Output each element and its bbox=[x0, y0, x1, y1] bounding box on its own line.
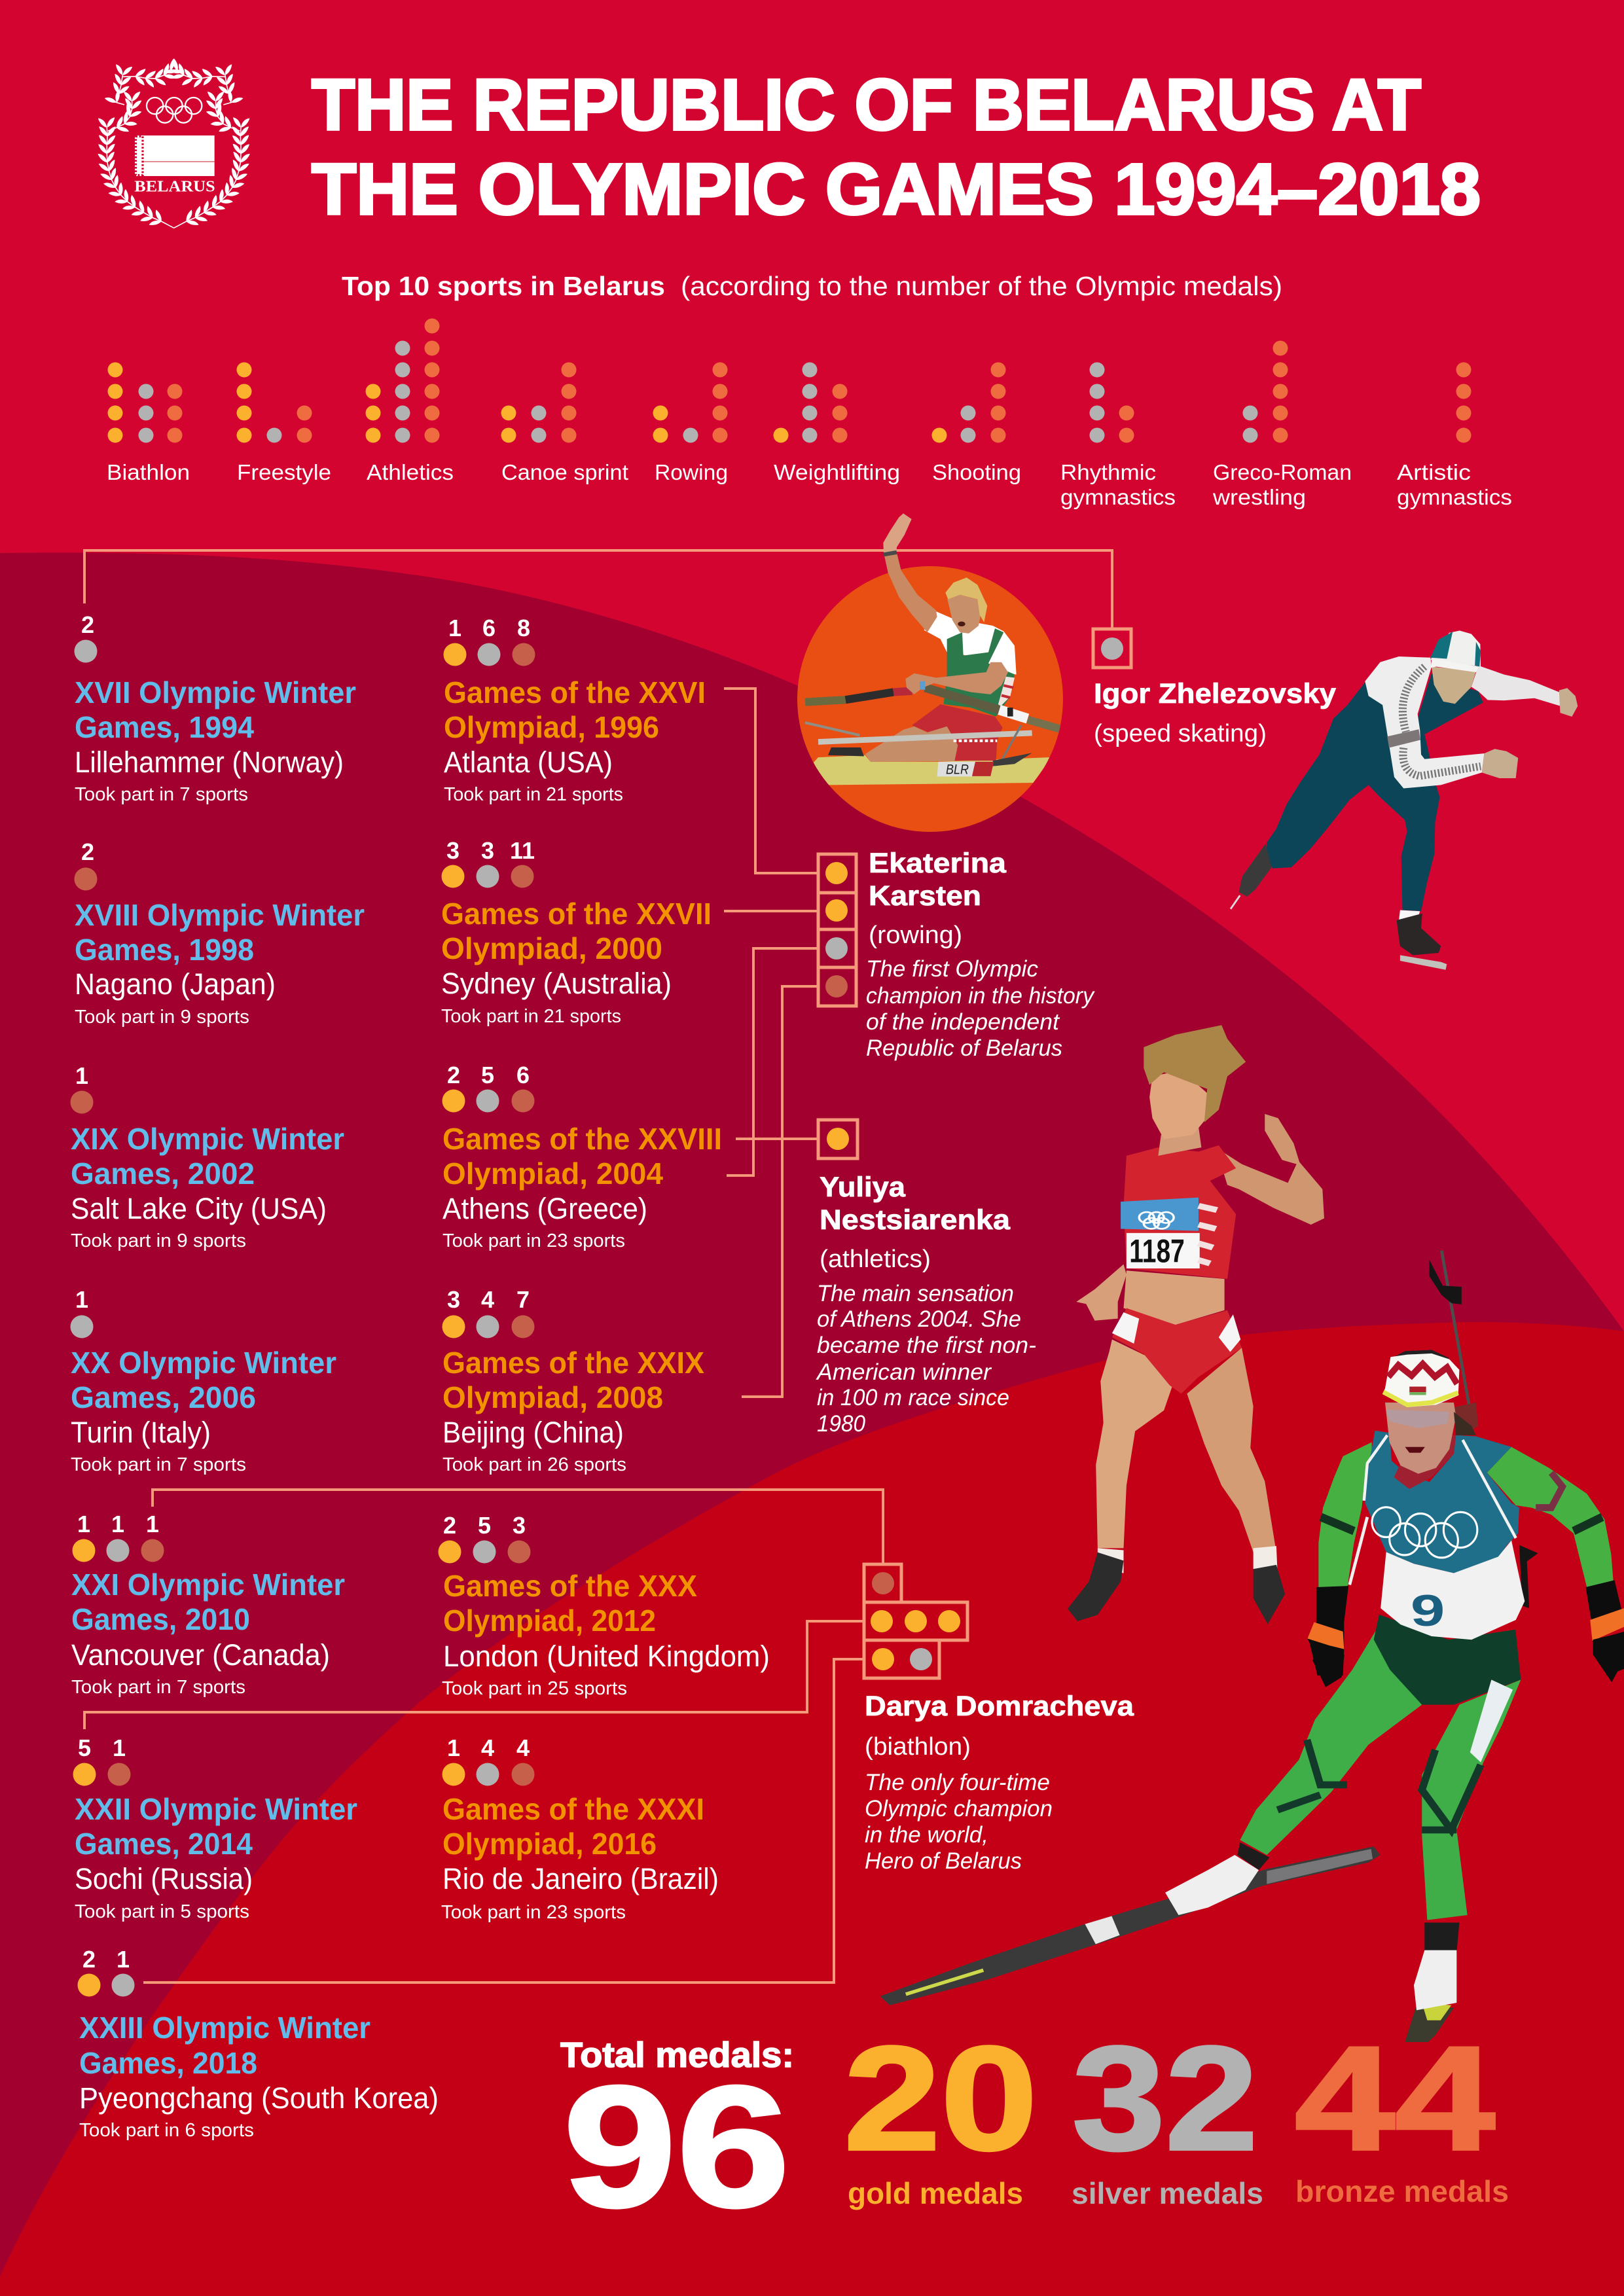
entry: XXI Winter 2010: XXI Olympic Winter bbox=[71, 1568, 345, 1602]
text: Igor Zhelezovsky: (speed skating) bbox=[1094, 720, 1267, 747]
entry: XIX Winter 2002: XIX Olympic Winter bbox=[71, 1122, 344, 1156]
sport: Biathlon: Biathlon bbox=[107, 460, 190, 484]
entry: XXI Winter 2010: Vancouver (Canada) bbox=[71, 1638, 330, 1672]
sport: Greco-Roman wrestling: wrestling bbox=[1212, 485, 1306, 509]
bronze medals: 44: bronze medals bbox=[1295, 2174, 1509, 2208]
entry: XIX Winter 2002 bbox=[71, 1062, 344, 1251]
medal boxes: Ekaterina Karsten bbox=[818, 854, 856, 1006]
entry: XXVIII Summer 2004: 2 bbox=[447, 1062, 460, 1088]
sport: Athletics bbox=[365, 318, 454, 484]
sport: Rhythmic gymnastics: Rhythmic bbox=[1060, 460, 1156, 484]
medal boxes: Darya Domracheva bbox=[864, 1564, 967, 1678]
entry: XXVII Summer 2000: Games of the XXVII bbox=[441, 897, 712, 931]
entry: XXVI Summer 1996 bbox=[444, 615, 706, 805]
entry: XXXI Summer 2016: 4 bbox=[516, 1734, 530, 1761]
text: Ekaterina Karsten: (rowing) bbox=[869, 922, 962, 949]
entry: XXIX Summer 2008: Took part in 26 sports bbox=[442, 1454, 626, 1475]
text: Yuliya Nestsiarenka: American winner bbox=[816, 1359, 992, 1385]
text: Igor Zhelezovsky bbox=[1094, 678, 1336, 747]
entry: XXVII Summer 2000: 3 bbox=[481, 837, 494, 864]
background: red lower wave bbox=[0, 1322, 1624, 2296]
subtitle: top 10 sports: (according to the number of the Olympic medals) bbox=[681, 271, 1282, 301]
sport: Rowing bbox=[653, 363, 728, 484]
entry: XXI Winter 2010: Games, 2010 bbox=[71, 1602, 250, 1636]
connector lines bbox=[84, 550, 1112, 1982]
photo: sprinter Yuliya Nestsiarenka bbox=[1068, 1025, 1324, 1624]
total medals: 96: 96 bbox=[563, 2050, 790, 2243]
entry: XXVI Summer 1996: 8 bbox=[517, 615, 530, 641]
text: Yuliya Nestsiarenka bbox=[816, 1172, 1036, 1437]
entry: XXIX Summer 2008: 3 bbox=[447, 1286, 460, 1313]
title: THE REPUBLIC OF BELARUS AT bbox=[312, 65, 1421, 145]
entry: XX Winter 2006: Games, 2006 bbox=[71, 1380, 256, 1414]
sport: Canoe sprint: Canoe sprint bbox=[501, 460, 628, 484]
entry: XVII Winter 1994: Games, 1994 bbox=[75, 710, 254, 744]
sport: Artistic gymnastics: Artistic bbox=[1397, 460, 1471, 484]
entry: XXVII Summer 2000: 11 bbox=[510, 837, 535, 864]
entry: XXXI Summer 2016: Games of the XXXI bbox=[442, 1792, 704, 1826]
sport: Weightlifting bbox=[774, 363, 900, 484]
photo: orange circle with rower Ekaterina Karsten bbox=[797, 513, 1063, 832]
sport: Rowing: Rowing bbox=[655, 460, 728, 484]
entry: XXVIII Summer 2004: Games of the XXVIII bbox=[442, 1122, 722, 1156]
entry: XXII Winter 2014 bbox=[73, 1734, 357, 1922]
entry: XXVII Summer 2000: Sydney (Australia) bbox=[441, 967, 672, 1000]
silver medals: 32: 32 bbox=[1072, 2015, 1258, 2181]
entry: XXIX Summer 2008: 4 bbox=[481, 1286, 494, 1313]
photo: sprinter Yuliya Nestsiarenka: 1187 bbox=[1129, 1233, 1185, 1269]
entry: XVIII Winter 1998 bbox=[75, 838, 365, 1028]
sport: Artistic gymnastics bbox=[1397, 363, 1512, 509]
text: Darya Domracheva: in the world, bbox=[865, 1822, 988, 1848]
entry: XXX Summer 2012: Olympiad, 2012 bbox=[443, 1604, 656, 1638]
entry: XXVI Summer 1996: 6 bbox=[482, 615, 496, 641]
entry: XXIX Summer 2008 bbox=[442, 1286, 704, 1475]
entry: XXIII Winter 2018: 2 bbox=[82, 1946, 96, 1973]
entry: XXVI Summer 1996: 1 bbox=[448, 615, 461, 641]
entry: XXIII Winter 2018 bbox=[77, 1946, 439, 2141]
entry: XXI Winter 2010 bbox=[71, 1511, 345, 1698]
sport: Weightlifting: Weightlifting bbox=[774, 460, 900, 484]
text: Ekaterina Karsten: The first Olympic bbox=[866, 956, 1038, 982]
sport: Freestyle bbox=[237, 363, 331, 484]
torso and head bbox=[1307, 1251, 1624, 1676]
text: Yuliya Nestsiarenka: in 100 m race since bbox=[817, 1385, 1009, 1410]
entry: XVIII Winter 1998: 2 bbox=[81, 838, 94, 865]
entry: XVII Winter 1994: 2 bbox=[81, 611, 94, 638]
entry: XXXI Summer 2016: Took part in 23 sports bbox=[441, 1902, 626, 1923]
text: Yuliya Nestsiarenka: of Athens 2004. She bbox=[817, 1306, 1021, 1332]
sport: Biathlon bbox=[107, 363, 190, 484]
chart: top 10 sports medal dots bbox=[107, 318, 1512, 509]
entry: XXIX Summer 2008: Games of the XXIX bbox=[442, 1346, 704, 1380]
entry: XVIII Winter 1998: XVIII Olympic Winter bbox=[75, 898, 365, 932]
entry: XXII Winter 2014: Games, 2014 bbox=[75, 1827, 253, 1861]
text: Yuliya Nestsiarenka: Yuliya bbox=[820, 1172, 906, 1203]
entry: XXX Summer 2012 bbox=[439, 1512, 770, 1699]
background: dark wine wave bbox=[0, 552, 1624, 2296]
torso and head: 9 bbox=[1411, 1586, 1445, 1636]
entry: XXVIII Summer 2004: Olympiad, 2004 bbox=[442, 1157, 663, 1191]
entry: XXVII Summer 2000 bbox=[441, 837, 712, 1027]
photo: orange circle with rower Ekaterina Karsten: BLR bbox=[946, 762, 969, 778]
entry: XXIII Winter 2018: Took part in 6 sports bbox=[79, 2120, 254, 2141]
entry: XIX Winter 2002: Salt Lake City (USA) bbox=[71, 1192, 327, 1225]
medal box: Yuliya Nestsiarenka bbox=[818, 1120, 857, 1158]
entry: XVII Winter 1994 bbox=[75, 611, 356, 805]
entry: XXII Winter 2014: 5 bbox=[78, 1734, 91, 1761]
text: Ekaterina Karsten: of the independent bbox=[866, 1009, 1060, 1035]
entry: XXXI Summer 2016: Olympiad, 2016 bbox=[442, 1827, 657, 1861]
gold medals: 20: 20 bbox=[844, 2015, 1038, 2181]
text: Ekaterina Karsten: champion in the history bbox=[866, 983, 1095, 1009]
text: Yuliya Nestsiarenka: Nestsiarenka bbox=[820, 1204, 1011, 1236]
entry: XXVIII Summer 2004: 5 bbox=[481, 1062, 494, 1088]
entry: XX Winter 2006: 1 bbox=[75, 1286, 88, 1313]
entry: XVIII Winter 1998: Games, 1998 bbox=[75, 933, 254, 967]
text: Yuliya Nestsiarenka: 1980 bbox=[817, 1411, 865, 1437]
entry: XXVII Summer 2000: Olympiad, 2000 bbox=[441, 931, 662, 965]
sport: Athletics: Athletics bbox=[367, 460, 454, 484]
ski bbox=[880, 1615, 1521, 2048]
entry: XX Winter 2006 bbox=[71, 1286, 336, 1475]
text: Darya Domracheva: Darya Domracheva bbox=[865, 1691, 1134, 1722]
gold medals: 20: gold medals bbox=[848, 2176, 1023, 2210]
subtitle: top 10 sports bbox=[342, 271, 1282, 301]
sport: Greco-Roman wrestling: Greco-Roman bbox=[1213, 460, 1352, 484]
entry: XXVI Summer 1996: Games of the XXVI bbox=[444, 675, 706, 709]
sport: Freestyle: Freestyle bbox=[237, 460, 331, 484]
entry: XVII Winter 1994: XVII Olympic Winter bbox=[75, 675, 356, 709]
entry: XXVII Summer 2000: 3 bbox=[446, 837, 460, 864]
photo: biathlete Darya Domracheva bbox=[880, 1251, 1624, 2048]
entry: XXXI Summer 2016: 1 bbox=[447, 1734, 460, 1761]
medal box: Igor Zhelezovsky bbox=[1093, 629, 1131, 668]
entry: XXVI Summer 1996: Took part in 21 sports bbox=[444, 784, 623, 805]
entry: XVIII Winter 1998: Nagano (Japan) bbox=[75, 967, 276, 1001]
entry: XX Winter 2006: Turin (Italy) bbox=[71, 1416, 211, 1449]
text: Ekaterina Karsten: Karsten bbox=[869, 880, 981, 912]
entry: XXIX Summer 2008: Olympiad, 2008 bbox=[442, 1380, 663, 1414]
sport: Greco-Roman wrestling bbox=[1212, 340, 1352, 509]
logo: Belarus Olympic crest bbox=[107, 71, 241, 228]
text: Darya Domracheva: Olympic champion bbox=[865, 1796, 1053, 1821]
entry: XXVII Summer 2000: Took part in 21 sports bbox=[441, 1006, 621, 1027]
entry: XXXI Summer 2016: 4 bbox=[481, 1734, 494, 1761]
total medals: 96: Total medals: bbox=[560, 2036, 794, 2075]
entry: XIX Winter 2002: Games, 2002 bbox=[71, 1157, 255, 1191]
bronze medals: 44: 44 bbox=[1295, 2015, 1495, 2181]
entry: XXXI Summer 2016 bbox=[441, 1734, 719, 1923]
sport: Shooting: Shooting bbox=[932, 460, 1021, 484]
silver medals: 32: silver medals bbox=[1072, 2176, 1263, 2210]
entry: XXX Summer 2012: 2 bbox=[443, 1512, 456, 1539]
entry: XXVIII Summer 2004 bbox=[442, 1062, 722, 1251]
entry: XX Winter 2006: XX Olympic Winter bbox=[71, 1346, 336, 1380]
sport: Shooting bbox=[932, 363, 1021, 484]
entry: XIX Winter 2002: 1 bbox=[75, 1062, 88, 1089]
entry: XX Winter 2006: Took part in 7 sports bbox=[71, 1454, 246, 1475]
entry: XXX Summer 2012: Games of the XXX bbox=[443, 1569, 697, 1603]
entry: XXII Winter 2014: 1 bbox=[113, 1734, 126, 1761]
entry: XXVIII Summer 2004: 6 bbox=[516, 1062, 530, 1088]
text: Darya Domracheva: Hero of Belarus bbox=[865, 1848, 1022, 1874]
entry: XVII Winter 1994: Took part in 7 sports bbox=[75, 784, 248, 805]
entry: XXIX Summer 2008: Beijing (China) bbox=[442, 1416, 624, 1449]
text: Ekaterina Karsten: Ekaterina bbox=[869, 848, 1007, 879]
text: Yuliya Nestsiarenka: The main sensation bbox=[817, 1281, 1014, 1306]
gloves lower bbox=[1312, 1632, 1624, 1687]
entry: XXIII Winter 2018: Pyeongchang (South Korea) bbox=[79, 2081, 439, 2115]
bronze medals: 44 bbox=[1295, 2015, 1509, 2208]
text: Yuliya Nestsiarenka: became the first non- bbox=[817, 1333, 1036, 1358]
entry: XVII Winter 1994: Lillehammer (Norway) bbox=[75, 745, 344, 779]
entry: XXI Winter 2010: 1 bbox=[146, 1511, 159, 1537]
text: Ekaterina Karsten bbox=[866, 848, 1095, 1061]
entry: XXX Summer 2012: 3 bbox=[513, 1512, 526, 1539]
entry: XXVIII Summer 2004: Athens (Greece) bbox=[442, 1192, 647, 1225]
entry: XXVIII Summer 2004: Took part in 23 sports bbox=[442, 1230, 625, 1251]
entry: XXII Winter 2014: Sochi (Russia) bbox=[75, 1862, 253, 1895]
entry: XXX Summer 2012: 5 bbox=[478, 1512, 491, 1539]
entry: XXIII Winter 2018: Games, 2018 bbox=[79, 2046, 257, 2080]
text: Igor Zhelezovsky: Igor Zhelezovsky bbox=[1094, 678, 1336, 709]
subtitle: top 10 sports: Top 10 sports in Belarus bbox=[342, 271, 665, 301]
entry: XIX Winter 2002: Took part in 9 sports bbox=[71, 1230, 246, 1251]
title: THE OLYMPIC GAMES 1994–2018 bbox=[312, 149, 1481, 230]
entry: XXIII Winter 2018: 1 bbox=[117, 1946, 130, 1973]
entry: XXX Summer 2012: London (United Kingdom) bbox=[443, 1640, 770, 1673]
logo: Belarus Olympic crest: BELARUS bbox=[134, 178, 215, 195]
text: Darya Domracheva bbox=[865, 1691, 1134, 1874]
text: Ekaterina Karsten: Republic of Belarus bbox=[866, 1035, 1062, 1061]
text: Darya Domracheva: The only four-time bbox=[865, 1770, 1050, 1795]
entry: XXII Winter 2014: Took part in 5 sports bbox=[75, 1901, 249, 1922]
entry: XXX Summer 2012: Took part in 25 sports bbox=[442, 1678, 627, 1699]
title bbox=[312, 65, 1481, 230]
entry: XXVI Summer 1996: Olympiad, 1996 bbox=[444, 710, 659, 744]
entry: XXI Winter 2010: 1 bbox=[77, 1511, 90, 1537]
entry: XXI Winter 2010: Took part in 7 sports bbox=[71, 1677, 245, 1698]
sport: Rhythmic gymnastics bbox=[1060, 363, 1176, 509]
entry: XXIII Winter 2018: XXIII Olympic Winter bbox=[79, 2011, 370, 2045]
entry: XXIX Summer 2008: 7 bbox=[516, 1286, 530, 1313]
entry: XVIII Winter 1998: Took part in 9 sports bbox=[75, 1007, 249, 1028]
sport: Rhythmic gymnastics: gymnastics bbox=[1060, 485, 1176, 509]
entry: XXII Winter 2014: XXII Olympic Winter bbox=[75, 1792, 357, 1826]
text: Yuliya Nestsiarenka: (athletics) bbox=[820, 1246, 931, 1273]
photo: speed skater Igor Zhelezovsky bbox=[1231, 630, 1578, 970]
sport: Canoe sprint bbox=[501, 363, 628, 484]
entry: XXXI Summer 2016: Rio de Janeiro (Brazil) bbox=[442, 1862, 719, 1895]
text: Darya Domracheva: (biathlon) bbox=[865, 1733, 971, 1761]
entry: XXVI Summer 1996: Atlanta (USA) bbox=[444, 745, 613, 779]
sport: Artistic gymnastics: gymnastics bbox=[1397, 485, 1512, 509]
entry: XXI Winter 2010: 1 bbox=[111, 1511, 124, 1537]
